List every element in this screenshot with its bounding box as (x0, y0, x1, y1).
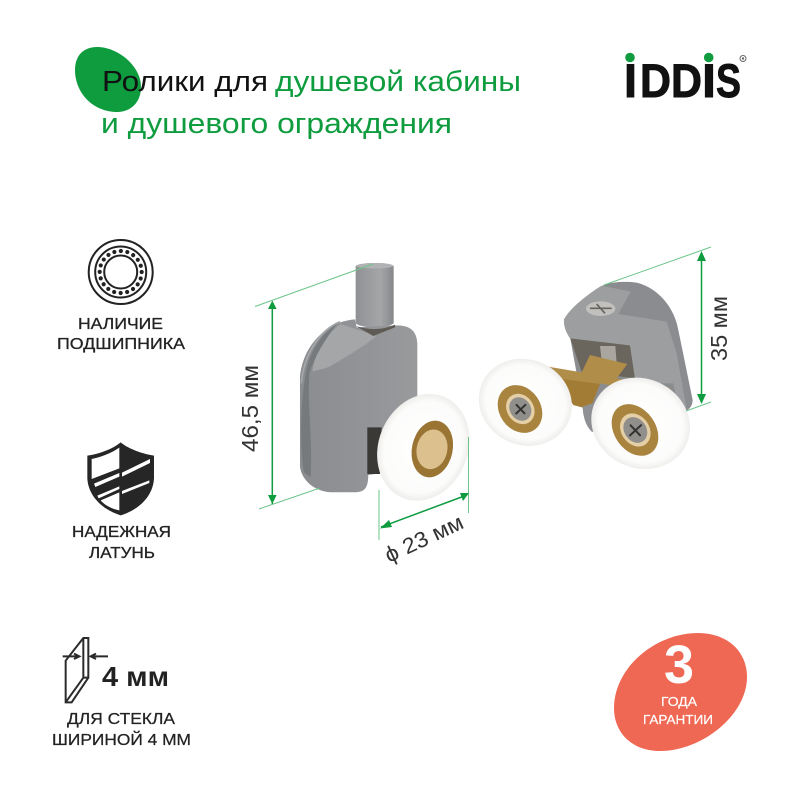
logo: IDDIS: I (624, 54, 637, 107)
warranty text: ГАРАНТИИ (643, 712, 713, 727)
dimension: 23 mm (379, 437, 469, 568)
right wheel (576, 362, 705, 485)
title line 2: и душевого ограждения (101, 108, 452, 140)
label: bearing: НАЛИЧИЕ (78, 316, 163, 333)
label: 35 mm: 35 мм (706, 296, 732, 361)
warranty text (643, 694, 713, 727)
icon: bearing (89, 240, 153, 304)
warranty badge (614, 633, 747, 751)
icon: shield (87, 442, 154, 515)
product: two-wheel roller (464, 282, 705, 485)
warranty number: 3 (664, 635, 694, 695)
label: diameter 23 mm: ϕ 23 мм (381, 509, 467, 568)
label: brass: ЛАТУНЬ (89, 545, 155, 562)
green blob (75, 47, 141, 112)
threaded bolt (600, 346, 617, 363)
label: glass: ШИРИНОЙ 4 ММ (52, 730, 191, 749)
left wheel (464, 344, 586, 461)
body (300, 319, 417, 492)
title line 1 green part: душевой кабины (275, 66, 521, 98)
dimension: 35 mm (604, 247, 732, 411)
dimension: 46,5 mm (237, 264, 373, 509)
brass bracket (538, 355, 671, 409)
label: glass: ДЛЯ СТЕКЛА (67, 711, 175, 728)
logo: IDDIS (624, 53, 746, 107)
label: brass (72, 524, 171, 562)
label: bearing (57, 316, 185, 353)
label: bearing: ПОДШИПНИКА (57, 336, 185, 353)
icon: glass thickness (63, 638, 108, 702)
title line 1: Ролики для (102, 66, 268, 98)
top screw (586, 301, 615, 316)
warranty text: ГОДА (661, 694, 697, 709)
logo: IDDIS: I (702, 54, 716, 107)
logo: IDDIS: D (640, 54, 671, 107)
product: single-wheel roller (300, 263, 485, 515)
wheel (361, 380, 485, 515)
pin (356, 263, 394, 327)
title (75, 47, 521, 140)
logo: IDDIS: S (716, 54, 741, 107)
label: glass (52, 711, 191, 749)
grey body base (583, 400, 603, 433)
body (570, 282, 693, 420)
label: brass: НАДЕЖНАЯ (72, 524, 171, 541)
logo: IDDIS: D (671, 54, 702, 107)
label: 46,5 mm: 46,5 мм (237, 365, 263, 452)
label: 4 mm: 4 мм (102, 661, 169, 692)
